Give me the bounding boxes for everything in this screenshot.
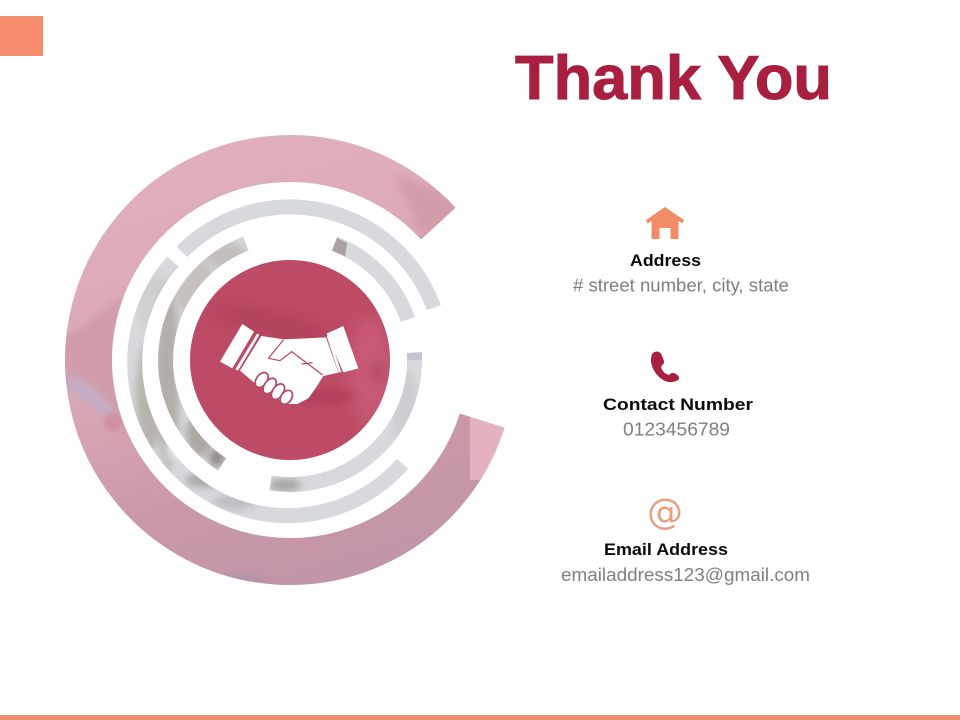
contact number heading: Contact Number — [603, 395, 753, 414]
contact block: address — [573, 207, 789, 296]
icon: at sign: @ — [647, 492, 683, 533]
title: Thank You — [515, 44, 832, 113]
email heading: Email Address — [604, 540, 728, 559]
address value: # street number, city, state — [573, 276, 789, 296]
circular photo graphic — [55, 125, 515, 595]
contact block: email — [561, 492, 810, 585]
icon: phone — [651, 352, 679, 382]
inner grey photo arcs — [120, 190, 450, 530]
icon: house — [646, 207, 684, 239]
icon: handshake — [220, 324, 358, 407]
contact number value: 0123456789 — [623, 420, 730, 440]
center photo circle — [185, 255, 395, 465]
corner accent square — [0, 16, 43, 56]
address heading: Address — [630, 251, 701, 270]
bottom accent bar — [0, 715, 960, 720]
contact block: phone — [603, 352, 753, 440]
outer photo ring — [55, 125, 515, 595]
email value: emailaddress123@gmail.com — [561, 564, 810, 585]
